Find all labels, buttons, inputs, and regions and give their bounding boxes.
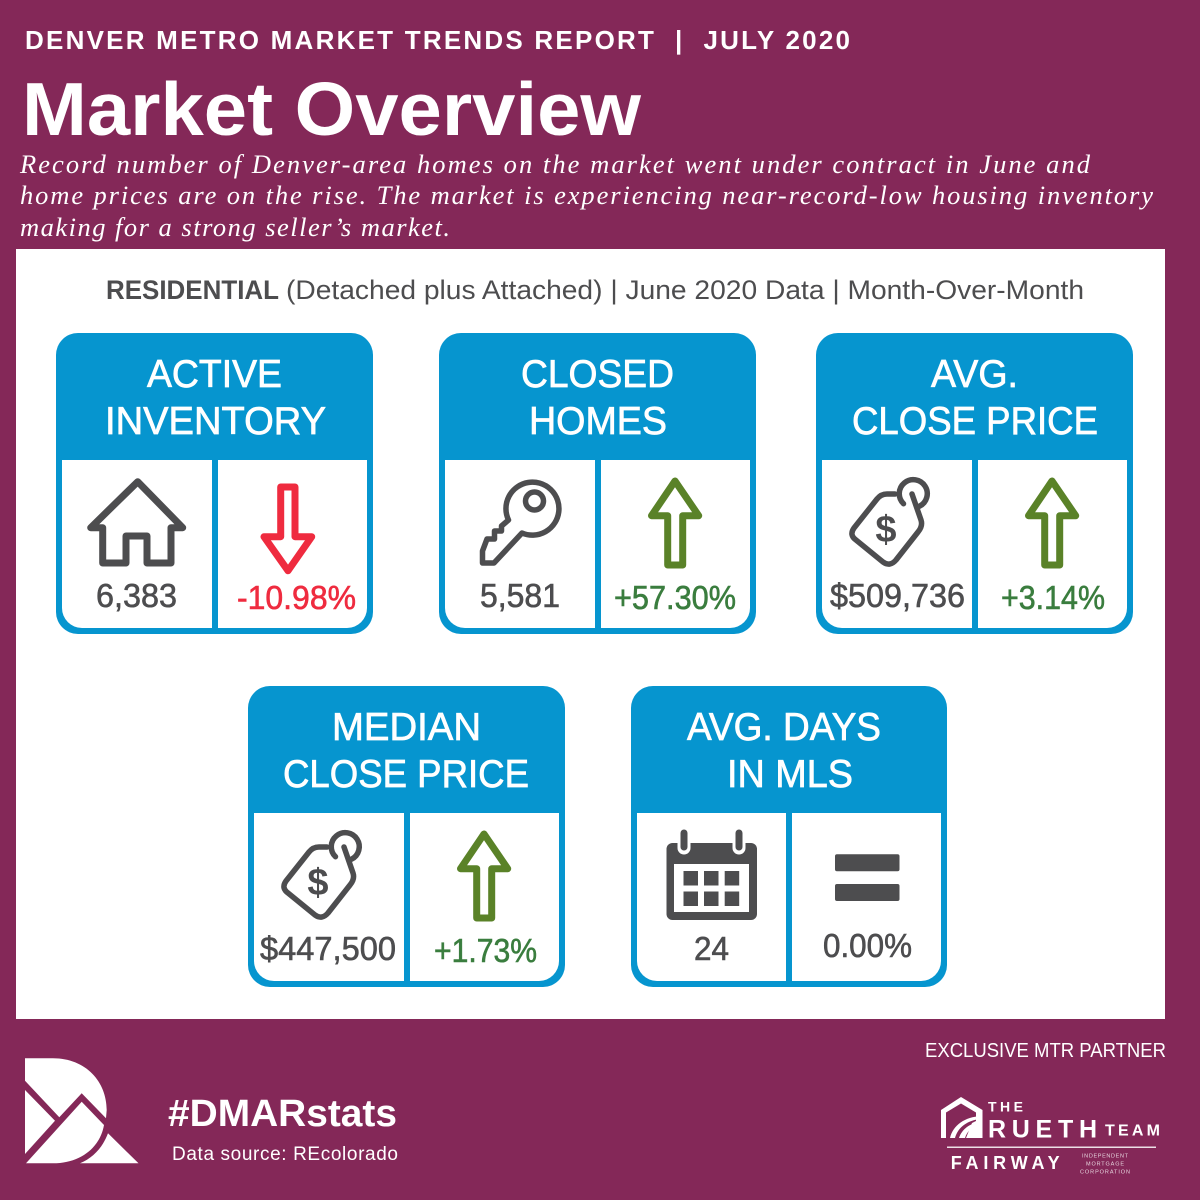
icon: price tag: $	[875, 509, 897, 551]
card: average days in MLS	[631, 686, 947, 987]
value: 5,581	[480, 577, 560, 614]
logo: DMAR	[25, 1058, 138, 1163]
change: 0.00%	[823, 927, 912, 964]
icon: calendar	[666, 833, 757, 920]
card heading: INVENTORY	[105, 400, 326, 443]
change: -10.98%	[237, 579, 356, 616]
card heading: MEDIAN	[332, 706, 481, 749]
card heading: CLOSE PRICE	[283, 753, 529, 796]
wordmark: the: THE	[988, 1099, 1023, 1115]
icon: house swoosh	[941, 1097, 982, 1138]
card frame	[816, 333, 1133, 634]
hashtag: #DMARstats	[168, 1093, 397, 1135]
card frame	[439, 333, 756, 634]
wordmark: independent mortgage corporation: INDEPENDENT	[1082, 1153, 1129, 1159]
icon: price tag	[852, 480, 927, 564]
value: 6,383	[96, 577, 177, 614]
card heading	[105, 353, 326, 443]
arrow: up	[652, 481, 699, 565]
value: $509,736	[830, 577, 965, 614]
card: average close price	[816, 333, 1133, 634]
wordmark: independent mortgage corporation: CORPORATION	[1080, 1169, 1130, 1175]
value: $447,500	[260, 930, 396, 967]
wordmark: independent mortgage corporation: MORTGAGE	[1086, 1161, 1124, 1167]
arrow: up	[1028, 481, 1076, 565]
card: closed homes	[439, 333, 756, 634]
intro text: Record number of Denver-area homes on the market went under contract in June and	[19, 149, 1091, 179]
intro text: home prices are on the rise. The market is experiencing near-record-low housing inventory	[20, 180, 1153, 210]
card frame	[631, 686, 947, 987]
change: +57.30%	[614, 579, 736, 616]
icon: price tag: $	[307, 862, 329, 904]
wordmark: rueth: RUETH	[988, 1116, 1097, 1144]
panel subtitle: RESIDENTIAL	[106, 275, 279, 305]
icon: key	[482, 482, 559, 563]
value: 24	[694, 930, 729, 967]
card: median close price	[248, 686, 565, 987]
card heading	[687, 706, 881, 796]
card heading: IN MLS	[727, 753, 853, 796]
card frame	[248, 686, 565, 987]
card heading: CLOSED	[521, 353, 674, 396]
wordmark: independent mortgage corporation	[1080, 1153, 1130, 1175]
icon: equals	[835, 854, 900, 901]
panel: residential data	[16, 249, 1165, 1019]
arrow: down	[264, 487, 312, 571]
title: Market Overview	[22, 67, 642, 151]
wordmark: team: TEAM	[1105, 1123, 1160, 1140]
change: +3.14%	[1001, 579, 1105, 616]
partner label: EXCLUSIVE MTR PARTNER	[925, 1039, 1166, 1062]
intro text: making for a strong seller’s market.	[20, 212, 450, 242]
card heading: HOMES	[529, 400, 667, 443]
card frame	[56, 333, 373, 634]
card heading: AVG. DAYS	[687, 706, 881, 749]
card heading: ACTIVE	[147, 353, 282, 396]
icon: house	[91, 482, 183, 563]
card: active inventory	[56, 333, 373, 634]
card heading	[521, 353, 674, 443]
divider	[947, 1146, 1156, 1148]
card heading	[852, 353, 1098, 443]
intro text	[19, 149, 1153, 242]
change: +1.73%	[434, 932, 537, 969]
card heading	[283, 706, 529, 796]
card heading: CLOSE PRICE	[852, 400, 1098, 443]
wordmark: fairway: FAIRWAY	[951, 1153, 1060, 1173]
arrow: up	[460, 834, 508, 918]
report header line: DENVER METRO MARKET TRENDS REPORT | JULY 2020	[25, 25, 850, 55]
icon: price tag	[284, 833, 359, 917]
panel subtitle: (Detached plus Attached) | June 2020 Data | Month-Over-Month	[286, 275, 1084, 305]
logo: The Rueth Team Fairway	[941, 1097, 1160, 1175]
data source: Data source: REcolorado	[172, 1144, 398, 1165]
card heading: AVG.	[931, 353, 1018, 396]
